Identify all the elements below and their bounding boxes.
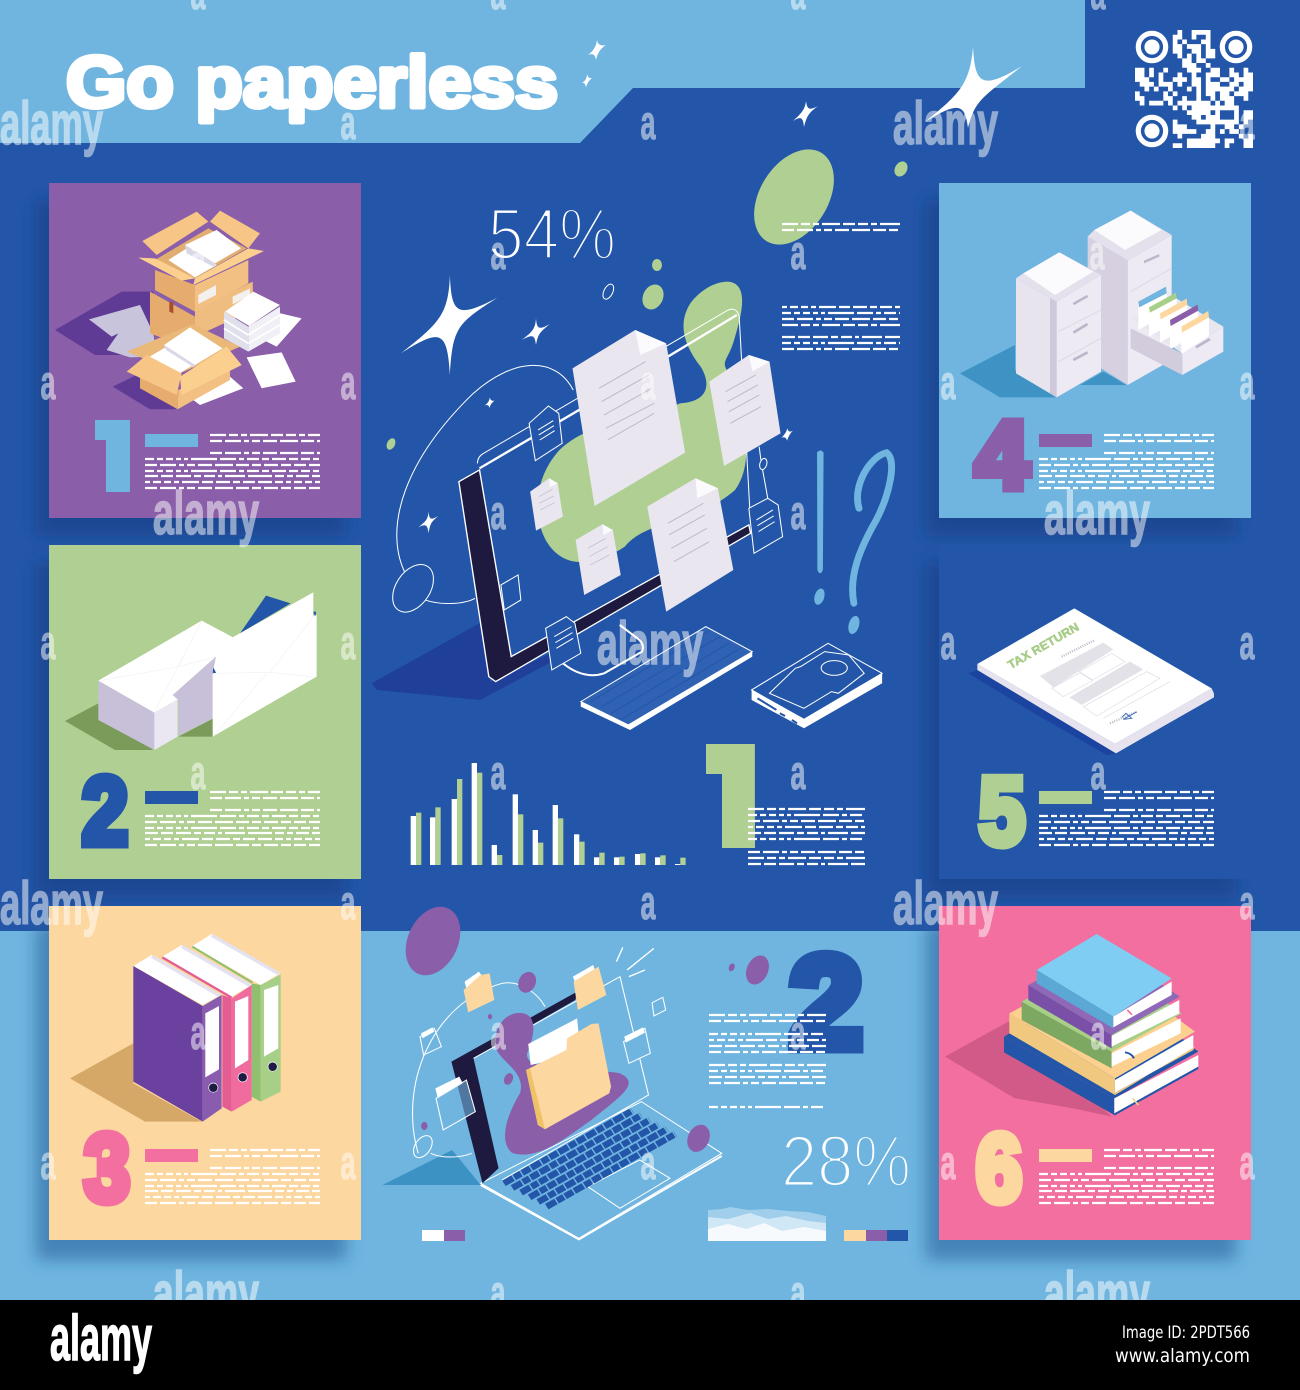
- text lines: [1039, 1150, 1214, 1203]
- accent bar: [145, 791, 198, 804]
- watermarks: a: [790, 747, 806, 800]
- watermarks: a: [490, 1007, 506, 1060]
- watermarks: a: [1090, 227, 1105, 280]
- green decorative blobs: [385, 135, 910, 451]
- keyboard: [581, 627, 752, 730]
- monitor stand: [563, 625, 643, 675]
- watermarks: a: [40, 1137, 56, 1190]
- watermarks: a: [640, 97, 656, 150]
- text lines: [1039, 435, 1214, 488]
- watermarks: a: [40, 617, 56, 670]
- watermarks: alamy: [893, 90, 998, 157]
- monitor screen outline: [477, 309, 751, 523]
- statistic 54%: 54%: [488, 195, 616, 275]
- header banner: [0, 0, 1085, 143]
- watermarks: alamy: [153, 480, 259, 547]
- panel 4: filing cabinets: [939, 183, 1251, 518]
- icon: ring binders: [70, 934, 281, 1122]
- sparkles: [401, 275, 793, 533]
- hard drive: [752, 643, 882, 728]
- laptop shadow: [382, 1150, 481, 1185]
- watermarks: a: [190, 747, 206, 800]
- panel 2: envelopes: [49, 545, 361, 879]
- accent bar: [1039, 434, 1092, 447]
- purple blob: [495, 1013, 629, 1155]
- accent bar: [1039, 791, 1092, 804]
- burst lines: [616, 947, 654, 977]
- watermarks: a: [190, 227, 206, 280]
- watermarks: a: [790, 487, 806, 540]
- document upper right: [709, 355, 781, 466]
- watermarks: alamy: [1044, 480, 1150, 547]
- central illustration: desktop monitor with floating documents: [372, 275, 892, 730]
- icon: stack of envelopes: [65, 592, 317, 750]
- icon: cardboard boxes with paper: [55, 211, 302, 409]
- watermarks: a: [790, 1267, 806, 1320]
- number 5: 5: [979, 758, 1025, 865]
- panel 5: tax return document: [939, 545, 1251, 879]
- legend swatches right: [844, 1230, 908, 1241]
- watermarks: alamy: [0, 90, 103, 157]
- watermarks: a: [640, 1137, 656, 1190]
- watermarks: a: [1090, 747, 1106, 800]
- footer logo: alamy: [50, 1302, 152, 1374]
- panel 1: boxes of paper: [49, 183, 361, 518]
- connector node: [759, 447, 768, 498]
- green blob: [538, 282, 746, 562]
- text block top right: [782, 224, 900, 230]
- laptop base: [481, 1102, 722, 1239]
- watermarks: a: [1090, 1007, 1106, 1060]
- laptop illustration with folders: [382, 947, 773, 1239]
- watermarks: a: [790, 227, 806, 280]
- form title: TAX RETURN: [1005, 620, 1081, 672]
- number 3: 3: [84, 1115, 130, 1222]
- document lower: [647, 478, 733, 612]
- icon: filing cabinets: [960, 211, 1223, 397]
- watermarks: alamy: [893, 870, 998, 937]
- watermarks: alamy: [597, 610, 703, 677]
- icon: header sparkles: [582, 40, 1022, 128]
- icon: stack of books: [945, 934, 1198, 1117]
- watermarks: a: [640, 877, 656, 930]
- document large: [573, 330, 685, 506]
- laptop keyboard: [504, 1111, 675, 1207]
- large folder: [526, 1018, 611, 1129]
- exclamation mark and question mark: [813, 450, 892, 635]
- text block right: [782, 307, 900, 349]
- watermarks: a: [1240, 97, 1255, 150]
- watermarks: a: [1240, 357, 1255, 410]
- text lines: [145, 435, 320, 488]
- document small centre: [576, 524, 621, 595]
- watermarks: a: [490, 747, 506, 800]
- watermarks: a: [340, 1137, 356, 1190]
- watermarks: a: [340, 97, 356, 150]
- text block under number 1: [748, 809, 865, 864]
- accent bar: [145, 1149, 198, 1162]
- watermarks: a: [340, 357, 356, 410]
- lower light blue band: [0, 931, 1300, 1300]
- purple dots: [421, 952, 773, 1155]
- small folders: [420, 965, 666, 1130]
- text block beside laptop: [709, 1015, 826, 1107]
- number 1: 1: [82, 391, 144, 514]
- area chart: [708, 1207, 826, 1241]
- watermarks: a: [940, 617, 956, 670]
- watermarks: a: [40, 357, 56, 410]
- footer bar: [0, 1300, 1300, 1390]
- footer image id: Image ID: 2PDT566: [1122, 1323, 1250, 1343]
- watermarks: a: [490, 487, 506, 540]
- icon: tax return form: [968, 608, 1214, 755]
- monitor shadow: [372, 623, 551, 700]
- orbit line: [413, 983, 545, 1157]
- big number 2: 2: [790, 929, 862, 1075]
- statistic 28%: 28%: [781, 1122, 911, 1202]
- watermarks: a: [790, 1007, 806, 1060]
- text lines: [145, 1150, 320, 1203]
- text lines: [1039, 792, 1214, 845]
- panel 6: books: [939, 906, 1251, 1240]
- big purple blob: [395, 898, 471, 984]
- orbit line: [397, 365, 573, 604]
- watermarks: a: [640, 357, 656, 410]
- watermarks: a: [340, 617, 356, 670]
- watermarks: a: [340, 877, 356, 930]
- watermarks: a: [1240, 877, 1255, 930]
- QR code: [1135, 32, 1253, 146]
- watermarks: a: [490, 227, 506, 280]
- footer url: www.alamy.com: [1115, 1345, 1250, 1367]
- card shadows: [36, 200, 1236, 1260]
- legend swatches left: [422, 1230, 465, 1241]
- accent bar: [145, 434, 198, 447]
- accent bar: [1039, 1149, 1092, 1162]
- watermarks: a: [1240, 617, 1255, 670]
- watermarks: a: [490, 1267, 506, 1320]
- page background: dark blue: [0, 0, 1300, 931]
- number 6: 6: [976, 1115, 1022, 1222]
- text lines: [145, 792, 320, 845]
- watermarks: a: [940, 357, 956, 410]
- monitor frame: [459, 470, 751, 682]
- panel 3: binders: [49, 906, 361, 1240]
- watermarks: a: [190, 1007, 206, 1060]
- document small left: [530, 478, 563, 531]
- outlined file icons: [501, 406, 783, 670]
- title: Go paperless: [66, 43, 558, 123]
- laptop screen frame: [451, 992, 577, 1183]
- number 2: 2: [82, 758, 128, 865]
- watermarks: a: [1240, 1137, 1255, 1190]
- watermarks: alamy: [0, 870, 103, 937]
- watermarks: a: [940, 1137, 956, 1190]
- number 4: 4: [975, 402, 1029, 509]
- watermarks: alamy: [153, 1260, 259, 1327]
- bar chart: [411, 763, 686, 865]
- watermarks: alamy: [1044, 1260, 1150, 1327]
- big number 1: 1: [688, 710, 772, 878]
